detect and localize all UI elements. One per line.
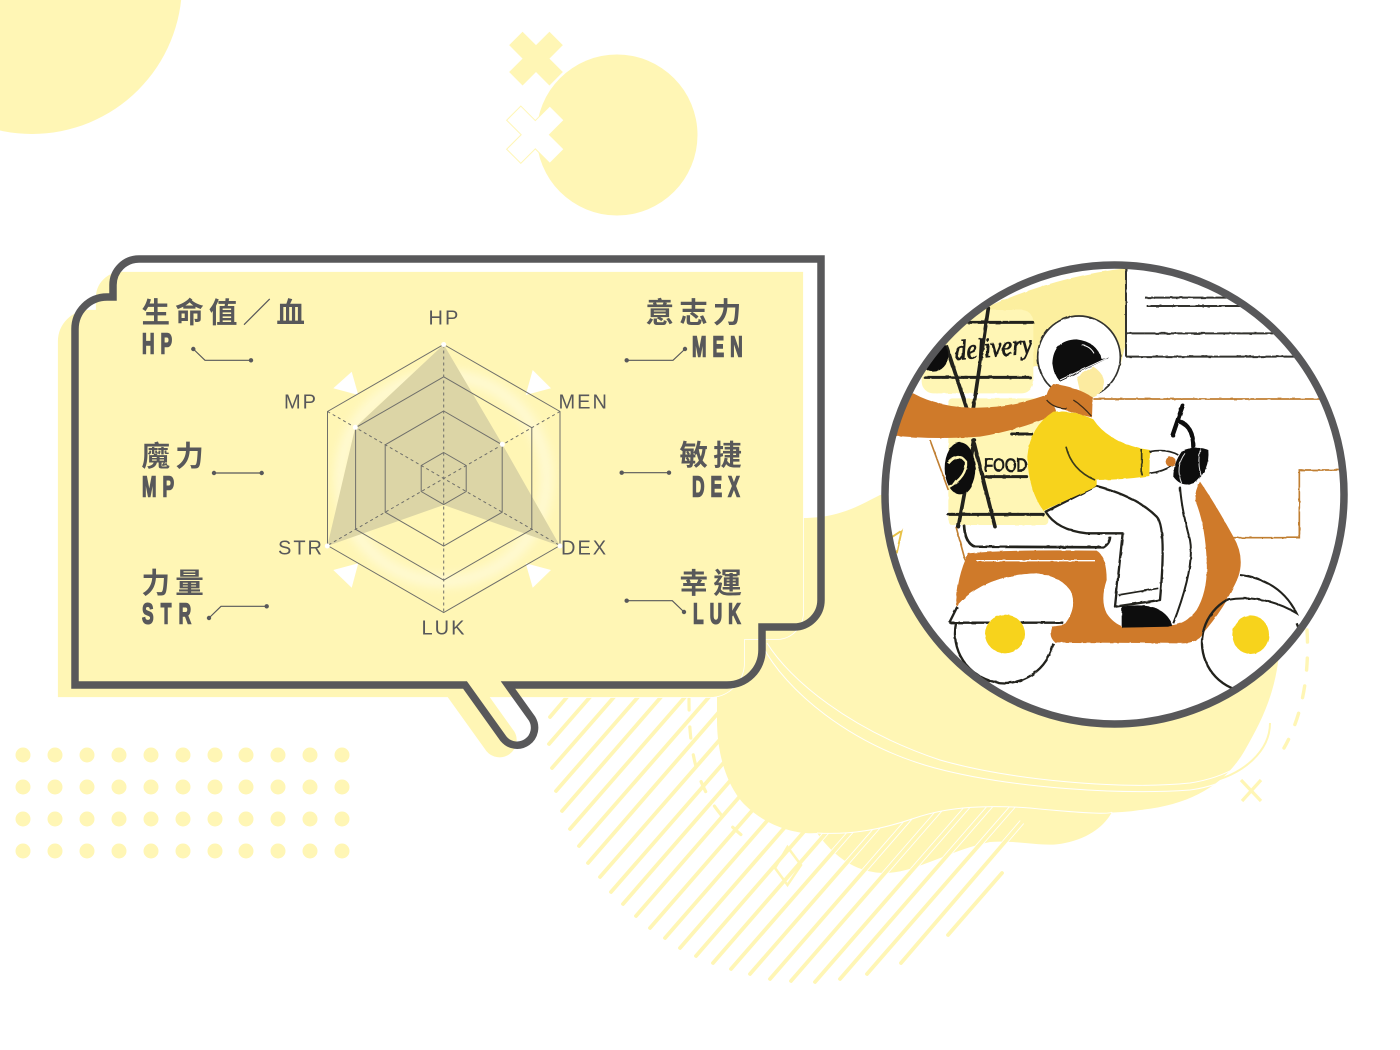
stat label: LUK xyxy=(624,568,747,631)
front hub xyxy=(1232,615,1269,654)
stat label: DEX: 敏捷 xyxy=(680,440,747,472)
axis labels: LUK xyxy=(422,618,466,640)
rear wheel xyxy=(955,623,1053,683)
helmet bubble xyxy=(1038,316,1120,398)
face xyxy=(1077,367,1104,397)
building lines xyxy=(1126,268,1295,357)
speech bubble outline xyxy=(75,259,821,745)
body highlight xyxy=(976,560,1095,562)
axis labels: MEN xyxy=(558,392,609,414)
hand grip xyxy=(1173,448,1208,485)
heart line xyxy=(948,457,966,487)
icon: white outlined cross xyxy=(492,92,578,178)
background blob: lower lobe xyxy=(817,790,1112,873)
dashed axes xyxy=(328,344,560,612)
jacket xyxy=(1027,411,1150,511)
stat label: MEN: 意志力 xyxy=(646,298,747,330)
axis labels: DEX xyxy=(561,538,608,560)
dot grid xyxy=(16,748,350,858)
stat label: MEN xyxy=(624,298,749,364)
scarf lines xyxy=(1047,400,1091,416)
lower sign board xyxy=(948,398,1048,525)
speech bubble fill xyxy=(58,272,804,758)
icon: solid yellow cross xyxy=(495,18,577,100)
sign text: FOOD: FOOD xyxy=(984,454,1027,475)
helmet highlight xyxy=(1060,345,1107,380)
orange thin lines xyxy=(930,399,1339,563)
corner markers xyxy=(333,370,551,588)
axis labels: HP xyxy=(428,308,460,330)
glow ring xyxy=(341,376,547,582)
stat label: DEX: DEX xyxy=(692,471,746,504)
decorative circle: top left xyxy=(0,0,182,134)
front stem line xyxy=(1173,487,1191,623)
stat label: HP xyxy=(142,296,310,362)
data points xyxy=(325,342,562,548)
dashed arc right xyxy=(1284,630,1308,748)
thumb xyxy=(1166,457,1176,467)
stat label: MP xyxy=(142,441,264,504)
dashed arc left xyxy=(689,699,745,838)
stat label: STR: STR xyxy=(142,598,198,631)
icon: small diamond xyxy=(775,847,801,885)
data polygon xyxy=(327,344,560,546)
front fender xyxy=(1227,575,1297,613)
scarf xyxy=(1047,384,1093,417)
stat label: DEX xyxy=(620,440,747,504)
thin contour lines on blob xyxy=(762,643,1270,792)
sign emblem heart xyxy=(945,442,975,494)
axis labels xyxy=(278,308,609,640)
rear scooter body xyxy=(956,482,1241,643)
seat xyxy=(964,525,1110,547)
stat label: STR xyxy=(142,568,269,631)
radar chart xyxy=(278,308,609,640)
small gold spike xyxy=(890,531,902,553)
decorative circle: top centre xyxy=(536,54,698,216)
stat label: MP: MP xyxy=(142,471,180,504)
hexagon rings xyxy=(328,344,560,612)
stat label: HP: HP xyxy=(142,328,178,361)
front wheel xyxy=(1202,600,1301,692)
axis labels: STR xyxy=(278,538,324,560)
sign text: delivery: delivery xyxy=(953,329,1034,367)
stat label: MP: 魔力 xyxy=(142,441,209,473)
diagonal hatch lines xyxy=(549,697,1108,982)
flying scarf band xyxy=(890,393,1057,438)
pale yellow wall xyxy=(980,268,1125,367)
stat label: MEN: MEN xyxy=(692,331,749,364)
rear hub xyxy=(985,615,1025,653)
circle frame xyxy=(885,265,1344,724)
fender line xyxy=(949,607,1063,623)
stat label: LUK: LUK xyxy=(693,598,747,631)
sign lines xyxy=(925,308,1043,527)
stat label: LUK: 幸運 xyxy=(680,568,747,600)
handlebar xyxy=(1173,406,1193,447)
icon: small x xyxy=(1241,780,1261,801)
white hatch outlines inside lobe xyxy=(820,807,1024,873)
rear fender xyxy=(957,573,1074,612)
circle illustration background xyxy=(886,266,1344,724)
background blob: main xyxy=(717,495,1283,833)
trouser cuff xyxy=(1118,588,1158,595)
illustration: delivery rider on scooter xyxy=(890,268,1339,692)
stat label: STR: 力量 xyxy=(142,568,209,600)
stat label: HP: 生命值／血 xyxy=(142,296,310,330)
jacket lines xyxy=(1066,447,1142,480)
thin contour tail outside blob xyxy=(1140,723,1270,787)
grip highlights xyxy=(1179,448,1202,483)
trousers xyxy=(1046,486,1163,607)
blob lower edge highlight xyxy=(817,807,1112,833)
helmet xyxy=(1052,339,1109,382)
upper sign board xyxy=(922,310,1033,393)
axis labels: MP xyxy=(284,392,318,414)
shoe xyxy=(1122,605,1172,628)
glove xyxy=(1149,451,1178,473)
sign emblem top xyxy=(926,345,948,372)
